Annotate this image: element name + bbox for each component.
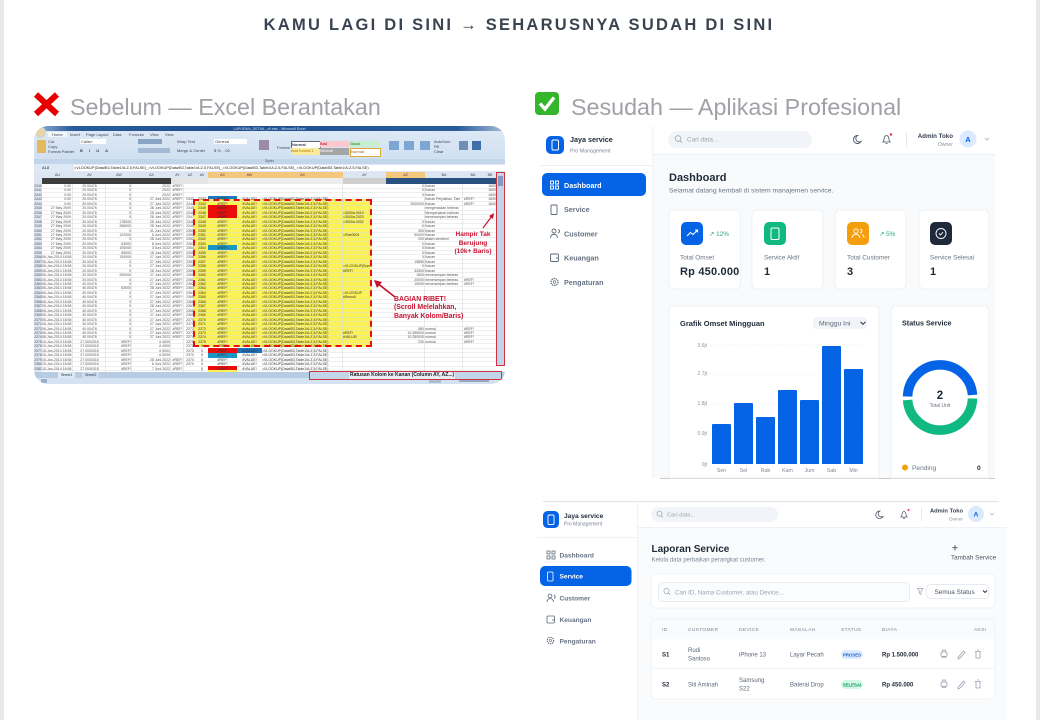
active nav: dashboard: Dashboard [564,181,602,190]
panel: service status donut: Total Unit [930,403,951,409]
excel title bar [34,126,505,133]
row header column: 2340 2341 2342 2343 2344 2345 2346 2347 2348 2349 2350 2351 2352 2353 2354 2355 2356 2357 2358 2359 2360 2361 2362 2363 2364 2365 2366 2367 2368 2369 2370 2371 2372 2373 2374 2375 2376 2377 2378 2379 2380 2381 [34,184,42,371]
callout: hampir tak berujung [454,231,492,255]
y axis labels: 0jt [702,462,708,468]
excel formula bar [34,164,505,172]
card: total omset: Rp 450.000 [680,266,739,278]
brand logo [543,511,604,528]
card: service aktif: Service Aktif [764,254,799,262]
excel ribbon: Wrap Text [177,139,195,144]
excel column headers: AX [220,173,225,177]
excel ribbon: $ % , .00 [214,148,230,153]
panel: weekly revenue chart [669,306,879,478]
nav: customer: Customer [560,596,591,602]
table row 2: SELESAI [843,682,861,687]
excel column headers: AY [362,173,367,177]
button: tambah service: Tambah Service [951,554,997,562]
excel ribbon: Styles [265,159,274,163]
excel ribbon: AutoSum [434,139,450,144]
trailing number column: 1600 1600 1800 1600 1600 [488,184,496,206]
user bar [876,506,994,522]
callout: hampir tak berujung: Hampir Tak [456,231,490,238]
card: total customer [835,210,906,289]
excel column headers: AV [200,173,204,177]
excel ribbon: Clear [434,149,444,154]
table row 2: S22 [739,686,750,692]
ref error column: #REF! #REF! #REF! #REF! #REF! #REF! #REF! #REF! #REF! #REF! #REF! #REF! #REF! #REF! #REF! #REF! #REF! #REF! #REF! #REF! #REF! #REF! #REF! #REF! #REF! #REF! #REF! #REF! #REF! #REF! #REF! #REF! #REF! #REF! #REF! #REF! #REF! #REF! [173,184,182,371]
search box: Cari data... [667,512,696,518]
table row 2: Samsung [739,678,764,684]
excel column headers: AY [175,173,180,177]
page heading [669,172,833,194]
card: total customer: 3 [847,266,853,278]
excel cell grid [34,184,505,372]
heading: before: Sebelum — Excel Berantakan [70,94,381,120]
excel column headers [34,172,505,184]
user bar: Admin Toko [918,133,953,140]
excel column headers: AZ [188,173,192,177]
y axis labels: 1.8jt [698,401,708,407]
table row 1: iPhone 13 [739,652,767,658]
table row 1 [662,648,981,662]
x axis labels: Jum [805,468,814,474]
donut green arc [908,398,972,430]
excel ribbon: Page Layout [86,132,108,137]
nav: keuangan: Keuangan [564,254,599,262]
excel column headers: BB [488,173,492,177]
callout: bagian ribet: BAGIAN RIBET! [394,296,446,303]
table row 2: S2 [662,682,670,688]
table header: MASALAH [790,627,816,633]
card: service aktif: 1 [764,266,770,278]
excel column headers: AW [247,173,252,177]
user bar [854,130,989,148]
horizontal scrollbar callout: Ratusan Kolom ke Kanan (Column AY, AZ...) [350,372,454,378]
excel formula bar: =VLOOKUP(Data!B3,Table1!A:Z,5,FALSE)_=VLOOKUP(Data!B3,Table1!A:Z,5,FALSE)_=VLOOKUP(Data!B3,Table1!A:Z,5,FALSE)_=VLOOKUP(Data!B3,Table1!A:Z,5,FALSE) [74,166,369,170]
page heading [652,544,766,564]
table row 2: Baterai Drop [790,682,824,688]
callout: hampir tak berujung: Berujung [459,240,487,247]
card: service selesai: Service Selesai [930,254,974,262]
brand logo: Jaya service [570,135,613,144]
active nav: service: Service [560,574,583,580]
ref cells column: #REF! #REF! #REF! #REF! #REF! #REF! #REF! #REF! #REF! #REF! #REF! #REF! #REF! #REF! #REF! #REF! #REF! #REF! #REF! #REF! #REF! #REF! #REF! #REF! #REF! #REF! #REF! #REF! #REF! #REF! #REF! #REF! #REF! #REF! #REF! #REF! #REF! #REF! #REF! [218,197,227,371]
user bar: Owner [949,516,963,522]
amount column: 0 0 0 0 0 0 0 0 178000 266000 0 122000 0 63000 100000 65000 130000 0 0 0 200000 0 0 63000 0 0 0 0 0 0 0 0 0 0 0 #REF! #REF! #REF! #REF! #REF! #REF! #REF! [119,184,131,371]
card: service aktif [752,210,823,289]
excel column headers: AX [300,173,305,177]
excel ribbon: View [150,132,159,137]
excel ribbon: Merge & Center [177,148,205,153]
table header: BIAYA [882,627,898,633]
right page edge [1036,0,1040,720]
x axis labels: Kam [782,468,793,474]
x axis labels: Rab [761,468,770,474]
nav: pengaturan: Pengaturan [564,278,604,287]
brand logo: Pro Management [570,148,611,154]
period select [813,317,867,329]
y axis labels: 2.7jt [698,371,708,377]
card: service selesai: 1 [930,266,936,278]
excel ribbon: Calibri [81,139,92,144]
card: total omset: Total Omset [680,254,714,262]
brand logo: Jaya service [564,513,604,520]
x axis labels: Min [849,468,858,474]
table row 1: Rp 1.500.000 [882,652,919,658]
filter card: Semua Status [934,589,975,596]
service date column: 2022 2022 2022 27 Juni 2022 27 Juni 2022 28 Juni 2022 28 Juni 2022 28 Juni 2022 28 Juni 2022 28 Juni 2022 31 Juni 2022 5 Juni 2022 28 Juni 2022 8 Juni 2022 3 Juni 2022 18 Juni 2022 27 Juni 2022 27 Juni 2022 27 Juni 2022 28 Juni 2022 27 Juni 2022 27 Juni 2022 27 Juni 2022 28 Juni 2022 27 Juni 2022 27 Juni 2022 27 Juni 2022 28 Juni 2022 27 Juni 2022 27 Juni 2022 27 Juni 2022 27 Juni 2022 27 Juni 2022 27 Juni 2022 27 Juni 2022 # 4000 # 4000 # 5001 # 5000 28 Juni 2022 6 Juni 2022 7 Juni 2022 [150,184,170,371]
date column: 0:00 0:00 0:00 0:00 0:00 27 May 2009 27 May 2009 27 May 2009 27 May 2009 27 May 2009 27 May 2009 27 May 2009 27 May 2009 27 May 2009 27 May 2009 27 May 2009 06-Jan-2014 18:58 06-Jan-2014 18:58 06-Jan-2014 18:58 06-Jan-2014 18:58 06-Jan-2014 18:58 06-Jan-2014 18:58 06-Jan-2014 18:58 06-Jan-2014 18:58 06-Jan-2014 18:58 06-Jan-2014 18:58 06-Jan-2014 18:58 06-Jan-2014 18:58 06-Jan-2014 18:58 06-Jan-2014 18:58 06-Jan-2014 18:58 06-Jan-2014 18:58 06-Jan-2014 18:58 06-Jan-2014 18:58 06-Jan-2014 18:58 10-Jan-2014 18:58 10-Jan-2014 18:58 15-Jan-2014 18:58 15-Jan-2014 18:58 15-Jan-2014 18:58 15-Jan-2014 18:58 15-Jan-2014 18:58 [42,184,71,371]
bars [712,346,863,464]
callout: hampir tak berujung: (10k+ Baris) [454,248,492,255]
period select: Minggu Ini [819,320,851,328]
excel column headers: AX [149,173,154,177]
excel sheet tabs: Sheet2 [85,373,96,377]
page heading: Selamat datang kembali di sistem manajemen service. [669,188,833,194]
callout: bagian ribet [394,296,463,320]
x axis labels: Sen [717,468,726,474]
table header [662,627,986,633]
notes in yellow column: =3000a.0019 =3000a.2023 =3000a.0032 =Rbe0003 =VLOOKUP(Sum0 #REF! =VLOOKUP #Sesudi #REF! #VALUE! [343,211,372,339]
excel ribbon: Normal [351,149,364,154]
panel: messy excel screenshot [34,126,505,384]
nav: keuangan: Keuangan [560,617,591,624]
page heading: Kelola data perbaikan perangkat customer. [652,558,766,564]
card: total customer: Total Customer [847,254,891,262]
nav: customer: Customer [564,230,598,238]
excel ribbon: View [165,132,174,137]
card: total omset: ↗ 12% [709,231,729,238]
arrow: to yellow area [374,280,395,298]
card: total omset [669,210,740,289]
user bar: A [965,135,971,144]
price column: 0 0 0 2000000 0 0 300 50000 200 0 0 0 0 15850 0 32500 1500 20000 15000 580 10.355000 10.250000 230 [407,184,424,344]
excel ribbon: Data [113,132,121,137]
excel column headers: AV [87,173,92,177]
excel ribbon: Bad format 1 [291,148,314,153]
excel ribbon: Bad [320,141,327,146]
page heading: Laporan Service [652,544,730,555]
panel: service report app screenshot [537,501,1007,720]
excel ribbon: General [215,139,229,144]
search box [651,507,778,522]
yellow row id column: 2343 2344 2345 2346 2347 2348 2349 2350 2351 2352 2353 2354 2355 2356 2357 2358 2359 2360 2361 2362 2363 2364 2365 2366 2367 2368 2369 2370 2371 2372 2373 2374 2375 0 0 0 0 0 0 0 [198,197,206,372]
panel: weekly revenue chart: Grafik Omset Mingguan [680,319,765,328]
vertical scrollbar callout box [496,172,505,366]
excel ribbon: Format [277,145,290,150]
icon: green check [535,92,559,115]
y axis labels [698,343,708,468]
legend: pending: Pending [912,465,937,472]
excel ribbon: Fill [434,144,439,149]
excel ribbon: Copy [48,144,57,149]
x axis labels [717,468,858,474]
brand logo [546,135,613,154]
table header: DEVICE [739,627,759,633]
excel ribbon: Cut [48,139,54,144]
excel ribbon: Neutral [320,148,333,153]
y axis labels: 0.9jt [698,431,708,437]
table header: STATUS [841,627,862,633]
table row 1: Santoso [688,656,711,662]
icon: red cross [34,92,59,116]
panel: dashboard app screenshot [540,126,995,479]
formula column: =VLOOKUP(Data!B3,Table1!A:Z,5,FALSE) =VLOOKUP(Data!B3,Table1!A:Z,5,FALSE) =VLOOKUP(Data!B3,Table1!A:Z,5,FALSE) =VLOOKUP(Data!B3,Table1!A:Z,5,FALSE) =VLOOKUP(Data!B3,Table1!A:Z,5,FALSE) =VLOOKUP(Data!B3,Table1!A:Z,5,FALSE) =VLOOKUP(Data!B3,Table1!A:Z,5,FALSE) =VLOOKUP(Data!B3,Table1!A:Z,5,FALSE) =VLOOKUP(Data!B3,Table1!A:Z,5,FALSE) =VLOOKUP(Data!B3,Table1!A:Z,5,FALSE) =VLOOKUP(Data!B3,Table1!A:Z,5,FALSE) =VLOOKUP(Data!B3,Table1!A:Z,5,FALSE) =VLOOKUP(Data!B3,Table1!A:Z,5,FALSE) =VLOOKUP(Data!B3,Table1!A:Z,5,FALSE) =VLOOKUP(Data!B3,Table1!A:Z,5,FALSE) =VLOOKUP(Data!B3,Table1!A:Z,5,FALSE) =VLOOKUP(Data!B3,Table1!A:Z,5,FALSE) =VLOOKUP(Data!B3,Table1!A:Z,5,FALSE) =VLOOKUP(Data!B3,Table1!A:Z,5,FALSE) =VLOOKUP(Data!B3,Table1!A:Z,5,FALSE) =VLOOKUP(Data!B3,Table1!A:Z,5,FALSE) =VLOOKUP(Data!B3,Table1!A:Z,5,FALSE) =VLOOKUP(Data!B3,Table1!A:Z,5,FALSE) =VLOOKUP(Data!B3,Table1!A:Z,5,FALSE) =VLOOKUP(Data!B3,Table1!A:Z,5,FALSE) =VLOOKUP(Data!B3,Table1!A:Z,5,FALSE) =VLOOKUP(Data!B3,Table1!A:Z,5,FALSE) =VLOOKUP(Data!B3,Table1!A:Z,5,FALSE) =VLOOKUP(Data!B3,Table1!A:Z,5,FALSE) =VLOOKUP(Data!B3,Table1!A:Z,5,FALSE) =VLOOKUP(Data!B3,Table1!A:Z,5,FALSE) =VLOOKUP(Data!B3,Table1!A:Z,5,FALSE) =VLOOKUP(Data!B3,Table1!A:Z,5,FALSE) =VLOOKUP(Data!B3,Table1!A:Z,5,FALSE) =VLOOKUP(Data!B3,Table1!A:Z,5,FALSE) =VLOOKUP(Data!B3,Table1!A:Z,5,FALSE) =VLOOKUP(Data!B3,Table1!A:Z,5,FALSE) =VLOOKUP(Data!B3,Table1!A:Z,5,FALSE) =VLOOKUP(Data!B3,Table1!A:Z,5,FALSE) [262,197,328,371]
title: KAMU LAGI DI SINI → SEHARUSNYA SUDAH DI SINI [264,16,774,34]
excel sheet tabs: Sheet1 [61,373,72,377]
panel: service status donut: 2 [937,390,943,402]
nav: dashboard: Dashboard [560,552,594,560]
table row 1: PROSES [843,652,861,657]
table row 1: Rudi [688,648,700,654]
row id column: 2343 2344 2345 2346 2347 2348 2349 2350 2351 2352 2353 2354 2355 2356 2357 2358 2359 2360 2361 2362 2363 2364 2365 2366 2367 2368 2369 2370 2371 2372 2373 2374 2375 2370 2370 2370 2370 2370 [186,197,194,366]
excel column headers: AW [116,173,122,177]
excel ribbon: Good [350,141,360,146]
trailing ref column: #REF! #REF! #REF! #REF! #REF! #REF! #REF! #REF! [464,197,474,344]
sidebar navigation [542,173,646,287]
donut blue arc [908,365,972,396]
panel: service status donut [891,306,989,478]
excel column headers: BA [442,173,446,177]
left page edge [0,0,4,720]
arrow: to scrollbar [482,213,494,228]
user bar: Owner [938,142,953,148]
user bar: A [974,512,979,518]
table row 2 [662,678,981,692]
excel ribbon: Format Painter [48,149,74,154]
legend: pending [902,464,981,472]
yellow messy area outline [193,199,372,347]
excel formula bar: A18 [42,165,49,170]
nav: service: Service [564,205,590,214]
excel ribbon: Home [52,132,63,137]
legend: pending: 0 [977,465,981,472]
excel ribbon: Insert [70,132,80,137]
callout: bagian ribet: Banyak Kolom/Baris) [394,313,463,320]
page heading: Dashboard [669,172,726,184]
device text column: Kanan Kanan Kanan Kanan Perpakian, Tani Kanan mengeraskan bebeas Mempeniaran bebeas menerampan bebeas Kanan Kanan Kanan Kanan aktam sembeni Kanan Kanan Kanan Kanan Kanan Kanan Kanan menerampan bebeas menerampan bebeas menerampan bebeas normal normal normal normal [425,184,460,344]
excel office button [35,127,46,138]
table header: CUSTOMER [688,627,718,633]
excel status bar [34,378,505,384]
excel column headers: BA [471,173,475,177]
excel sheet tabs [34,372,505,378]
nav: pengaturan: Pengaturan [560,638,596,646]
table row 2: Rp 450.000 [882,682,914,688]
table row 2: Siti Aminah [688,682,718,688]
service table [651,619,995,699]
search box [668,131,812,148]
card: service selesai [919,210,989,289]
sidebar navigation [540,551,632,646]
excel column headers: AZ [403,173,408,177]
filter card: Cari ID, Nama Customer, atau Device... [675,590,784,596]
panel: service status donut: Status Service [902,318,952,328]
user bar: Admin Toko [930,508,963,514]
excel ribbon [34,131,505,164]
excel ribbon: Formula [129,132,144,137]
filter card [651,574,995,608]
card: total customer: ↗ 5% [879,231,896,238]
callout: bagian ribet: (Scroll Melelahkan, [394,304,456,311]
button: tambah service [951,545,997,562]
table row 1: S1 [662,652,670,658]
horizontal scrollbar callout [309,371,502,380]
search box: Cari data... [687,136,718,144]
table row 1: Layar Pecah [790,652,824,658]
y axis labels: 3.6jt [698,343,708,349]
excel ribbon: Normal [292,142,306,147]
x axis labels: Sab [827,468,836,474]
table header: AKSI [974,627,986,633]
heading: after: Sesudah — Aplikasi Profesional [571,94,901,120]
excel title bar: LAPORAN_DETAIL_v9.xlsx - Microsoft Excel [233,127,306,131]
duration column: 20.00476 20.00476 20.00476 20.00476 20.00476 20.00476 20.00476 20.00476 20.00476 20.00476 20.00476 20.00476 20.00476 20.00476 20.00476 20.00476 20.00476 20.00476 20.00476 20.00476 20.00476 20.00476 40.00476 40.00476 40.00476 40.00476 40.00476 40.00476 40.00476 40.00476 40.00476 40.00476 40.00476 40.00476 40.00476 27.0000315 27.0000315 27.0000315 27.0000315 27.0000315 27.0000315 27.0000315 [80,184,99,371]
table header: ID [662,627,668,633]
excel column headers: AU [55,173,60,177]
x axis labels: Sel [740,468,747,474]
brand logo: Pro Management [564,522,603,528]
value error column: #VALUE! #VALUE! #VALUE! #VALUE! #VALUE! #VALUE! #VALUE! #VALUE! #VALUE! #VALUE! #VALUE! #VALUE! #VALUE! #VALUE! #VALUE! #VALUE! #VALUE! #VALUE! #VALUE! #VALUE! #VALUE! #VALUE! #VALUE! #VALUE! #VALUE! #VALUE! #VALUE! #VALUE! #VALUE! #VALUE! #VALUE! #VALUE! #VALUE! #VALUE! #VALUE! #VALUE! #VALUE! #VALUE! #VALUE! [242,197,257,371]
excel ribbon: B I U A [80,148,110,153]
